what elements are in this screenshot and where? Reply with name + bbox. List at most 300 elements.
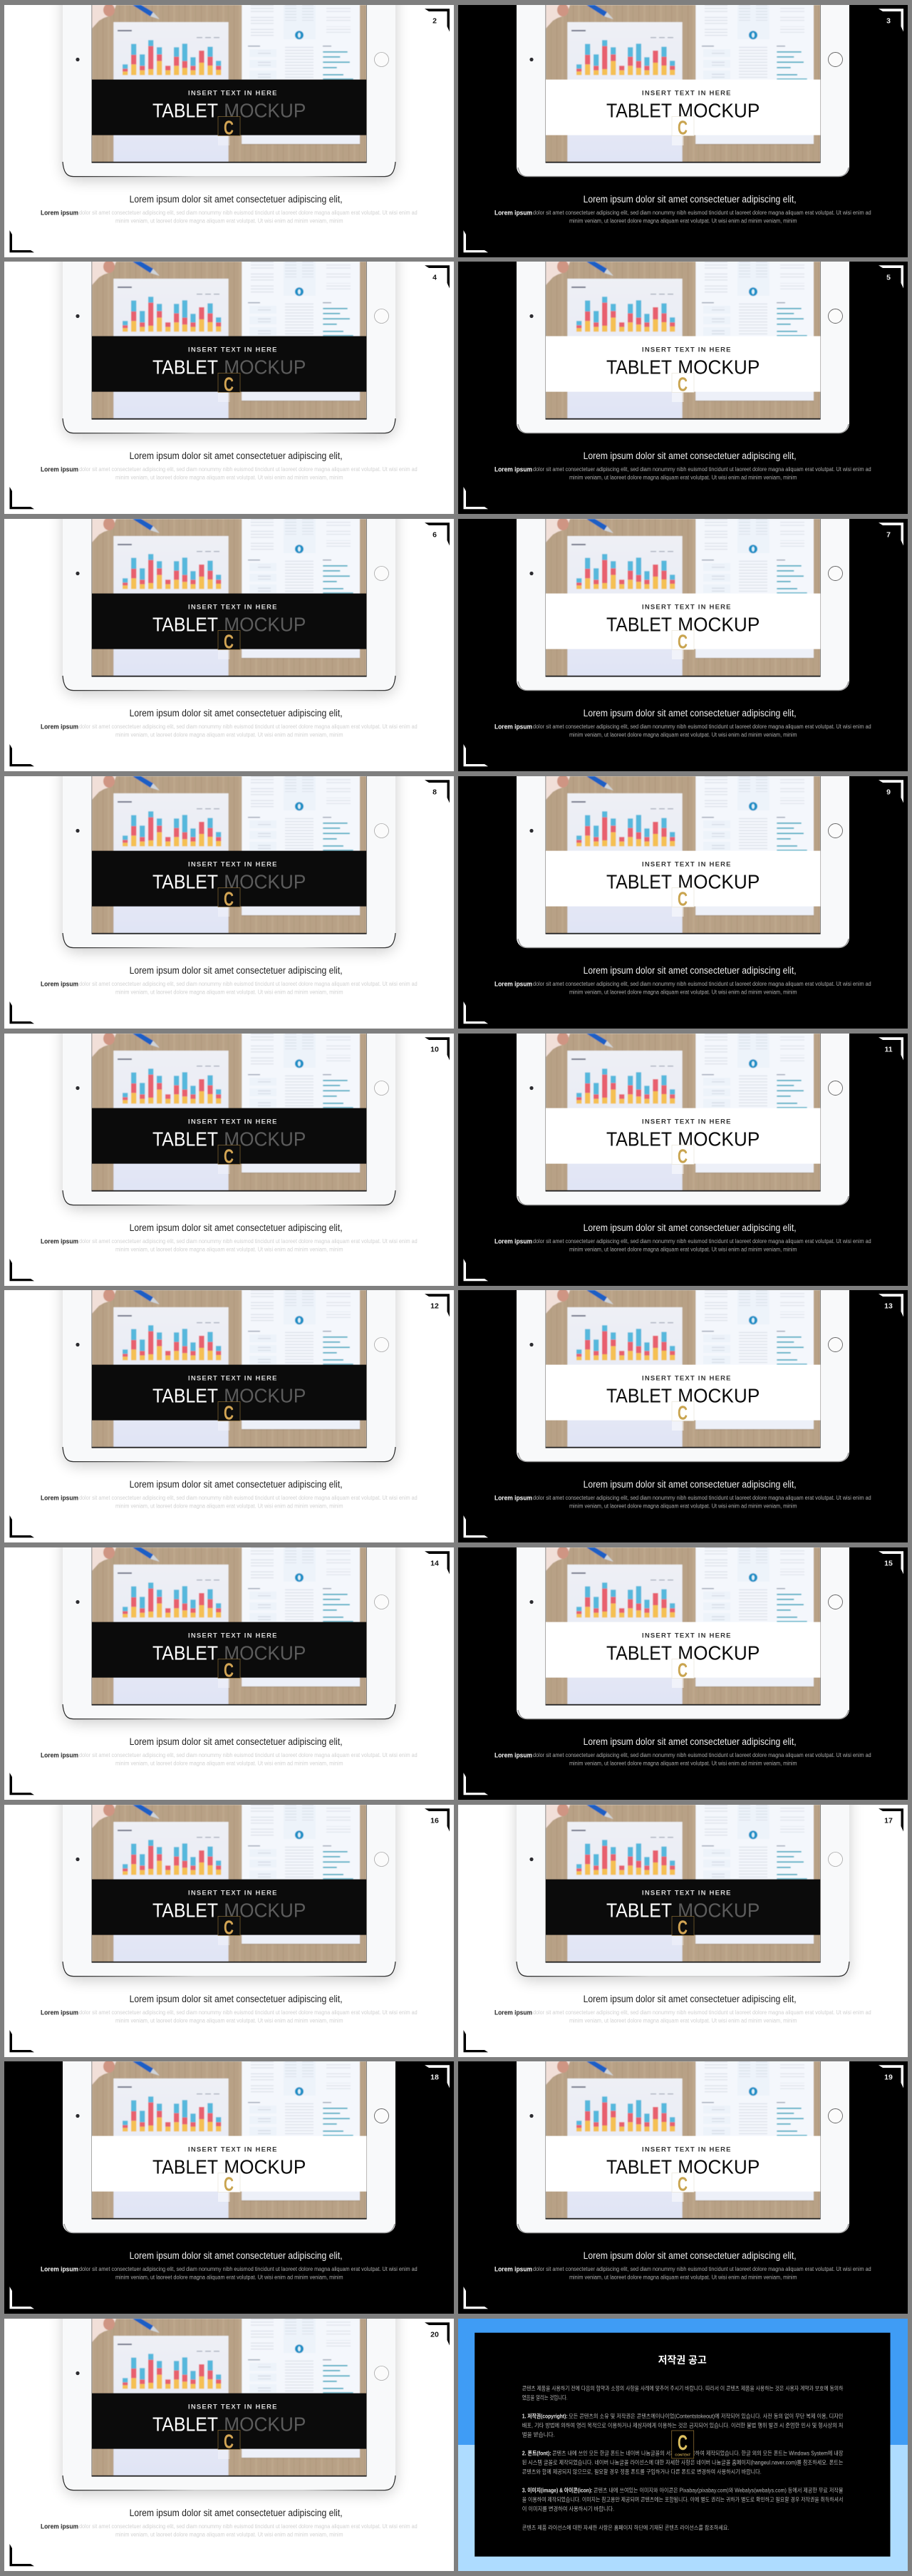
caption text: Lorem ipsum dolor sit amet consectetuer adipiscing elit, — [130, 965, 343, 976]
title band: MOCKUP — [224, 99, 306, 121]
page number bracket: 3 — [886, 17, 891, 25]
caption text: Lorem ipsum dolor sit amet consectetuer adipiscing elit, — [584, 450, 797, 461]
caption text: dolor sit amet consectetuer adipiscing elit, sed diam nonummy nibh euismod tincidunt ut laoreet dolore magna aliquam erat volutpat. Ut wisi enim ad — [533, 1752, 871, 1758]
panel: slide 9 — [458, 776, 908, 1029]
panel: slide 7 — [458, 519, 908, 771]
title band: TABLET — [606, 613, 672, 635]
caption text: minim veniam, ut laoreet dolore magna aliquam erat volutpat. Ut wisi enim ad minim veniam, minim — [115, 1760, 343, 1766]
clause 1: copyright: 벌을 받습니다. — [522, 2431, 555, 2438]
clause 2: font: 콘텐츠와 함께 제공되지 않으므로, 필요할 경우 정품 폰트를 구입하거나 다른 폰트로 변경하여 사용하시기 바랍니다. — [522, 2468, 762, 2475]
caption text: minim veniam, ut laoreet dolore magna aliquam erat volutpat. Ut wisi enim ad minim veniam, minim — [569, 732, 797, 738]
page number bracket: 16 — [430, 1817, 439, 1825]
clause 3: image and icon: 을 이용하여 제작되었습니다. 이미지는 참고용만 제공되며 콘텐츠에는 포함됩니다. 이에 별도 권리는 귀하가 별도로 확인하고 필요할 경우 저작권을 취득하셔서 — [522, 2496, 844, 2503]
caption text: Lorem ipsum dolor sit amet consectetuer adipiscing elit, — [584, 1736, 797, 1747]
intro paragraph — [522, 2384, 844, 2401]
logo badge: C — [678, 2431, 688, 2455]
caption text: Lorem ipsum dolor sit amet consectetuer adipiscing elit, — [130, 2250, 343, 2261]
caption text — [41, 1994, 418, 2024]
page number bracket — [425, 2066, 450, 2088]
title band: MOCKUP — [678, 1128, 760, 1150]
caption text: Lorem ipsum dolor sit amet consectetuer adipiscing elit, — [130, 708, 343, 718]
title band: INSERT TEXT IN HERE — [188, 1889, 276, 1897]
page number bracket: 18 — [430, 2074, 439, 2082]
page number bracket — [879, 780, 903, 803]
title band: MOCKUP — [678, 356, 760, 378]
logo badge: C — [678, 1659, 688, 1681]
logo badge: C — [678, 373, 688, 396]
title band: MOCKUP — [678, 1384, 760, 1406]
title band: TABLET — [606, 99, 672, 121]
caption text: Lorem ipsum dolor sit amet consectetuer adipiscing elit, — [130, 2508, 343, 2518]
logo badge — [218, 116, 240, 145]
title band: INSERT TEXT IN HERE — [188, 2146, 276, 2154]
title band: TABLET — [606, 2156, 672, 2178]
logo badge — [672, 1402, 694, 1431]
clause 1: copyright: 배포, 기타 방법에 의하여 영리 목적으로 이용하거나 제삼자에게 이용하는 것은 금지되어 있습니다. 이러한 불법 행위 발견 시 준엄한 민사 및 형사상의 처 — [522, 2422, 844, 2429]
tablet mockup with photo — [63, 1526, 395, 1723]
clause 1: copyright: 1. 저작권(copyright): — [522, 2413, 568, 2420]
clause 1: copyright — [522, 2413, 844, 2438]
tablet mockup with photo — [517, 2040, 849, 2233]
title band: TABLET — [152, 2413, 218, 2435]
title band — [546, 594, 821, 649]
page number bracket: 9 — [886, 788, 891, 796]
logo badge — [218, 1402, 240, 1431]
tablet mockup with photo — [517, 755, 849, 948]
title band: TABLET — [606, 1128, 672, 1150]
caption text — [41, 194, 418, 224]
title band — [546, 1622, 821, 1677]
page number bracket — [879, 522, 903, 546]
title band: MOCKUP — [678, 99, 760, 121]
title band: INSERT TEXT IN HERE — [188, 1632, 276, 1639]
title band: TABLET — [152, 613, 218, 635]
caption text: Lorem ipsum dolor sit amet consectetuer adipiscing elit, — [130, 194, 343, 205]
title band: TABLET — [606, 1384, 672, 1406]
logo badge — [218, 887, 240, 917]
caption text: minim veniam, ut laoreet dolore magna aliquam erat volutpat. Ut wisi enim ad minim veniam, minim — [569, 2017, 797, 2024]
corner bracket — [464, 1773, 488, 1795]
caption text: minim veniam, ut laoreet dolore magna aliquam erat volutpat. Ut wisi enim ad minim veniam, minim — [115, 475, 343, 481]
caption text — [41, 708, 418, 738]
title band — [92, 79, 366, 135]
caption text — [41, 1736, 418, 1766]
corner bracket — [464, 2030, 488, 2052]
logo badge: C — [224, 1402, 234, 1424]
title band: INSERT TEXT IN HERE — [642, 1889, 731, 1897]
caption text: dolor sit amet consectetuer adipiscing elit, sed diam nonummy nibh euismod tincidunt ut laoreet dolore magna aliquam erat volutpat. Ut wisi enim ad — [79, 723, 418, 730]
title band: INSERT TEXT IN HERE — [188, 860, 276, 868]
logo badge: C — [224, 1145, 234, 1167]
logo badge — [218, 2431, 240, 2459]
tablet mockup with photo — [63, 1783, 395, 1980]
corner bracket — [464, 1515, 488, 1537]
logo badge — [672, 1916, 694, 1945]
caption text — [41, 965, 418, 995]
title band: TABLET — [152, 1899, 218, 1921]
logo badge — [218, 373, 240, 402]
title band: MOCKUP — [678, 2156, 760, 2178]
page number bracket: 10 — [430, 1046, 439, 1053]
caption text — [494, 965, 871, 995]
caption text: Lorem ipsum — [41, 2266, 78, 2274]
panel: slide 14 — [4, 1547, 454, 1800]
caption text: dolor sit amet consectetuer adipiscing elit, sed diam nonummy nibh euismod tincidunt ut laoreet dolore magna aliquam erat volutpat. Ut wisi enim ad — [79, 1752, 418, 1758]
panel: slide 12 — [4, 1290, 454, 1542]
page number bracket: 2 — [432, 17, 437, 25]
corner bracket — [9, 1001, 34, 1024]
logo badge — [218, 1916, 240, 1945]
caption text: minim veniam, ut laoreet dolore magna aliquam erat volutpat. Ut wisi enim ad minim veniam, minim — [569, 217, 797, 224]
title band: MOCKUP — [678, 613, 760, 635]
tablet mockup with photo — [63, 755, 395, 952]
logo badge — [218, 1659, 240, 1688]
title band: INSERT TEXT IN HERE — [642, 89, 731, 97]
title band: INSERT TEXT IN HERE — [642, 860, 731, 868]
page number bracket: 12 — [430, 1302, 439, 1310]
caption text: minim veniam, ut laoreet dolore magna aliquam erat volutpat. Ut wisi enim ad minim veniam, minim — [115, 2532, 343, 2538]
caption text: Lorem ipsum dolor sit amet consectetuer adipiscing elit, — [584, 708, 797, 718]
notice title: 저작권 공고 — [658, 2354, 707, 2366]
page number bracket — [879, 1808, 903, 1831]
intro paragraph: 였음을 알리는 것입니다. — [522, 2394, 568, 2401]
tablet mockup with photo — [517, 240, 849, 433]
page number bracket — [425, 1551, 450, 1574]
black notice card — [475, 2333, 891, 2557]
title band: TABLET — [152, 1384, 218, 1406]
logo badge: C — [678, 1402, 688, 1424]
caption text: Lorem ipsum dolor sit amet consectetuer adipiscing elit, — [584, 194, 797, 205]
page number bracket: 14 — [430, 1560, 439, 1567]
caption text: minim veniam, ut laoreet dolore magna aliquam erat volutpat. Ut wisi enim ad minim veniam, minim — [115, 989, 343, 995]
caption text: Lorem ipsum dolor sit amet consectetuer adipiscing elit, — [584, 965, 797, 976]
caption text: minim veniam, ut laoreet dolore magna aliquam erat volutpat. Ut wisi enim ad minim veniam, minim — [115, 2017, 343, 2024]
tablet mockup with photo — [63, 2297, 395, 2494]
caption text — [494, 2250, 871, 2281]
clause 3: image and icon — [522, 2486, 844, 2512]
caption text: minim veniam, ut laoreet dolore magna aliquam erat volutpat. Ut wisi enim ad minim veniam, minim — [569, 1503, 797, 1510]
panel: slide 4 — [4, 262, 454, 514]
title band: MOCKUP — [224, 356, 306, 378]
caption text — [494, 1479, 871, 1510]
tablet mockup with photo — [517, 1526, 849, 1719]
caption text: minim veniam, ut laoreet dolore magna aliquam erat volutpat. Ut wisi enim ad minim veniam, minim — [569, 989, 797, 995]
caption text: dolor sit amet consectetuer adipiscing elit, sed diam nonummy nibh euismod tincidunt ut laoreet dolore magna aliquam erat volutpat. Ut wisi enim ad — [79, 2523, 418, 2530]
title band — [92, 594, 366, 649]
caption text: Lorem ipsum dolor sit amet consectetuer adipiscing elit, — [584, 1479, 797, 1490]
tablet mockup with photo — [63, 2040, 395, 2233]
caption text — [494, 1222, 871, 1252]
panel: slide 17 — [458, 1805, 908, 2057]
intro paragraph: 콘텐츠 제품을 사용하기 전에 다음의 협약과 소정의 사항을 사례에 맞추어 주시기 바랍니다. 따라서 이 콘텐츠 제품을 사용하는 것은 사용자 계약과 보호에 동의하 — [522, 2384, 844, 2391]
corner bracket — [9, 1515, 34, 1537]
caption text: dolor sit amet consectetuer adipiscing elit, sed diam nonummy nibh euismod tincidunt ut laoreet dolore magna aliquam erat volutpat. Ut wisi enim ad — [79, 981, 418, 987]
logo badge — [672, 1659, 694, 1688]
title band: TABLET — [606, 870, 672, 892]
logo badge: C — [224, 1659, 234, 1681]
tablet mockup with photo — [63, 498, 395, 694]
panel: slide 8 — [4, 776, 454, 1029]
logo badge — [672, 373, 694, 402]
title band — [92, 1365, 366, 1421]
caption text: minim veniam, ut laoreet dolore magna aliquam erat volutpat. Ut wisi enim ad minim veniam, minim — [569, 1246, 797, 1252]
page number bracket — [879, 1294, 903, 1317]
caption text — [494, 1736, 871, 1766]
panel: slide 6 — [4, 519, 454, 771]
caption text: Lorem ipsum — [41, 1495, 78, 1503]
corner bracket — [9, 1773, 34, 1795]
title band: MOCKUP — [224, 1128, 306, 1150]
panel: slide 19 — [458, 2061, 908, 2314]
title band: TABLET — [152, 1642, 218, 1664]
title band: INSERT TEXT IN HERE — [642, 1375, 731, 1383]
caption text: Lorem ipsum — [494, 1495, 532, 1503]
title band: MOCKUP — [224, 613, 306, 635]
caption text — [494, 194, 871, 224]
tablet mockup with photo — [517, 1269, 849, 1462]
caption text: Lorem ipsum — [494, 209, 532, 217]
caption text: Lorem ipsum dolor sit amet consectetuer adipiscing elit, — [130, 1222, 343, 1232]
title band: MOCKUP — [224, 870, 306, 892]
logo badge — [672, 887, 694, 917]
caption text: dolor sit amet consectetuer adipiscing elit, sed diam nonummy nibh euismod tincidunt ut laoreet dolore magna aliquam erat volutpat. Ut wisi enim ad — [533, 981, 871, 987]
caption text: Lorem ipsum — [41, 209, 78, 217]
caption text: dolor sit amet consectetuer adipiscing elit, sed diam nonummy nibh euismod tincidunt ut laoreet dolore magna aliquam erat volutpat. Ut wisi enim ad — [79, 466, 418, 473]
logo badge — [672, 2173, 694, 2202]
title band: MOCKUP — [678, 1642, 760, 1664]
logo badge: C — [224, 887, 234, 910]
title band: TABLET — [152, 870, 218, 892]
page number bracket — [879, 2066, 903, 2088]
corner bracket — [464, 1258, 488, 1281]
caption text: dolor sit amet consectetuer adipiscing elit, sed diam nonummy nibh euismod tincidunt ut laoreet dolore magna aliquam erat volutpat. Ut wisi enim ad — [533, 210, 871, 216]
caption text: dolor sit amet consectetuer adipiscing elit, sed diam nonummy nibh euismod tincidunt ut laoreet dolore magna aliquam erat volutpat. Ut wisi enim ad — [79, 210, 418, 216]
title band: INSERT TEXT IN HERE — [188, 1118, 276, 1125]
title band: INSERT TEXT IN HERE — [188, 346, 276, 354]
caption text: Lorem ipsum — [494, 2009, 532, 2016]
logo badge: C — [224, 1916, 234, 1938]
caption text: Lorem ipsum — [494, 980, 532, 988]
caption text: Lorem ipsum dolor sit amet consectetuer adipiscing elit, — [584, 2250, 797, 2261]
corner bracket — [464, 744, 488, 766]
page number bracket: 13 — [884, 1302, 893, 1310]
corner bracket — [9, 230, 34, 252]
tablet mockup with photo — [517, 0, 849, 177]
title band: MOCKUP — [224, 1899, 306, 1921]
title band — [92, 1879, 366, 1934]
logo badge: C — [224, 116, 234, 138]
caption text: Lorem ipsum — [41, 2523, 78, 2530]
title band: INSERT TEXT IN HERE — [642, 1118, 731, 1125]
title band — [92, 850, 366, 906]
page number bracket: 8 — [432, 788, 437, 796]
logo badge: C — [224, 373, 234, 396]
title band — [92, 2394, 366, 2449]
caption text: Lorem ipsum — [41, 980, 78, 988]
caption text: Lorem ipsum — [41, 723, 78, 731]
title band: TABLET — [606, 1899, 672, 1921]
caption text: dolor sit amet consectetuer adipiscing elit, sed diam nonummy nibh euismod tincidunt ut laoreet dolore magna aliquam erat volutpat. Ut wisi enim ad — [79, 2266, 418, 2272]
tablet mockup with photo — [63, 0, 395, 180]
page number bracket: 6 — [432, 531, 437, 539]
page number bracket — [425, 266, 450, 289]
page number bracket — [425, 9, 450, 31]
page number bracket — [879, 9, 903, 31]
title band: INSERT TEXT IN HERE — [188, 604, 276, 612]
logo badge — [672, 1145, 694, 1173]
corner bracket — [9, 2544, 34, 2566]
panel: slide 2 — [4, 5, 454, 257]
logo badge: C — [678, 887, 688, 910]
page number bracket — [879, 1551, 903, 1574]
caption text — [41, 1479, 418, 1510]
page number bracket — [879, 1037, 903, 1060]
clause 3: image and icon: 이 이미지를 변경하여 사용하시기 바랍니다. — [522, 2505, 614, 2512]
caption text — [41, 2250, 418, 2281]
corner bracket — [464, 2287, 488, 2309]
logo badge: C — [678, 631, 688, 653]
title band: INSERT TEXT IN HERE — [642, 346, 731, 354]
caption text: Lorem ipsum — [494, 466, 532, 474]
logo badge — [218, 2173, 240, 2202]
page number bracket: 15 — [884, 1560, 893, 1567]
title band — [546, 1879, 821, 1934]
page number bracket: 17 — [884, 1817, 893, 1825]
caption text: Lorem ipsum dolor sit amet consectetuer adipiscing elit, — [584, 1994, 797, 2004]
tablet mockup with photo — [517, 1783, 849, 1980]
panel: slide 16 — [4, 1805, 454, 2057]
logo badge: C — [678, 116, 688, 138]
caption text: Lorem ipsum dolor sit amet consectetuer adipiscing elit, — [130, 1479, 343, 1490]
page number bracket: 11 — [885, 1046, 893, 1053]
logo badge — [672, 116, 694, 145]
caption text: Lorem ipsum — [494, 1237, 532, 1245]
clause 3: image and icon: 3. 이미지(image) & 아이콘(icon): — [522, 2486, 593, 2493]
title band: MOCKUP — [224, 2413, 306, 2435]
title band: TABLET — [606, 356, 672, 378]
panel: slide 5 — [458, 262, 908, 514]
caption text — [494, 708, 871, 738]
corner bracket — [9, 487, 34, 510]
tablet mockup with photo — [63, 1012, 395, 1208]
page number bracket: 4 — [432, 274, 437, 282]
caption text: dolor sit amet consectetuer adipiscing elit, sed diam nonummy nibh euismod tincidunt ut laoreet dolore magna aliquam erat volutpat. Ut wisi enim ad — [79, 2009, 418, 2016]
panel: slide 18 — [4, 2061, 454, 2314]
clause 1: copyright: 모든 콘텐츠의 소유 및 저작권은 콘텐츠에이나이었(Contentstokeout)에 저작되어 있습니다. 사전 동의 없이 무단 복제 이용, 디자인 — [569, 2413, 844, 2420]
page number bracket — [425, 780, 450, 803]
closing line: 콘텐츠 제품 라이선스에 대한 자세한 사항은 홈페이지 하단에 기재된 콘텐츠 라이선스를 참조하세요. — [522, 2524, 730, 2531]
caption text: minim veniam, ut laoreet dolore magna aliquam erat volutpat. Ut wisi enim ad minim veniam, minim — [115, 2274, 343, 2281]
page number bracket — [425, 522, 450, 546]
tablet mockup with photo — [517, 1012, 849, 1205]
logo badge — [672, 631, 694, 659]
caption text: dolor sit amet consectetuer adipiscing elit, sed diam nonummy nibh euismod tincidunt ut laoreet dolore magna aliquam erat volutpat. Ut wisi enim ad — [533, 466, 871, 473]
title band: MOCKUP — [678, 1899, 760, 1921]
page number bracket — [425, 2322, 450, 2346]
caption text: dolor sit amet consectetuer adipiscing elit, sed diam nonummy nibh euismod tincidunt ut laoreet dolore magna aliquam erat volutpat. Ut wisi enim ad — [533, 1237, 871, 1244]
title band — [546, 2136, 821, 2192]
clause 2: font — [522, 2450, 844, 2475]
corner bracket — [464, 1001, 488, 1024]
caption text: minim veniam, ut laoreet dolore magna aliquam erat volutpat. Ut wisi enim ad minim veniam, minim — [569, 1760, 797, 1766]
caption text: dolor sit amet consectetuer adipiscing elit, sed diam nonummy nibh euismod tincidunt ut laoreet dolore magna aliquam erat volutpat. Ut wisi enim ad — [79, 1237, 418, 1244]
caption text: Lorem ipsum — [494, 1751, 532, 1759]
caption text — [41, 1222, 418, 1252]
tablet mockup with photo — [63, 1269, 395, 1465]
title band — [546, 1108, 821, 1163]
logo badge: C — [678, 1145, 688, 1167]
page number bracket: 19 — [884, 2074, 893, 2082]
title band: MOCKUP — [224, 1384, 306, 1406]
panel: slide 13 — [458, 1290, 908, 1542]
caption text: Lorem ipsum dolor sit amet consectetuer adipiscing elit, — [130, 1994, 343, 2004]
tablet mockup with photo — [63, 240, 395, 437]
title band: TABLET — [606, 1642, 672, 1664]
caption text: dolor sit amet consectetuer adipiscing elit, sed diam nonummy nibh euismod tincidunt ut laoreet dolore magna aliquam erat volutpat. Ut wisi enim ad — [533, 2009, 871, 2016]
caption text: minim veniam, ut laoreet dolore magna aliquam erat volutpat. Ut wisi enim ad minim veniam, minim — [115, 732, 343, 738]
caption text: Lorem ipsum dolor sit amet consectetuer adipiscing elit, — [584, 1222, 797, 1232]
title band: TABLET — [152, 1128, 218, 1150]
panel: slide 11 — [458, 1034, 908, 1286]
corner bracket — [9, 1258, 34, 1281]
caption text: Lorem ipsum — [41, 1237, 78, 1245]
caption text: minim veniam, ut laoreet dolore magna aliquam erat volutpat. Ut wisi enim ad minim veniam, minim — [115, 1246, 343, 1252]
page number bracket: 20 — [430, 2331, 439, 2339]
caption text — [494, 1994, 871, 2024]
title band: INSERT TEXT IN HERE — [188, 1375, 276, 1383]
caption text — [494, 450, 871, 481]
caption text: minim veniam, ut laoreet dolore magna aliquam erat volutpat. Ut wisi enim ad minim veniam, minim — [569, 2274, 797, 2281]
caption text: Lorem ipsum — [41, 1751, 78, 1759]
logo badge: C — [224, 2173, 234, 2195]
caption text: dolor sit amet consectetuer adipiscing elit, sed diam nonummy nibh euismod tincidunt ut laoreet dolore magna aliquam erat volutpat. Ut wisi enim ad — [533, 2266, 871, 2272]
caption text: Lorem ipsum — [41, 2009, 78, 2016]
logo badge — [672, 2431, 694, 2458]
corner bracket — [464, 230, 488, 252]
caption text: dolor sit amet consectetuer adipiscing elit, sed diam nonummy nibh euismod tincidunt ut laoreet dolore magna aliquam erat volutpat. Ut wisi enim ad — [533, 1495, 871, 1501]
clause 2: font: 된 시스템 글꼴로 제작되었습니다. 네이버 나눔글꼴 라이선스에 대한 자세한 사항은 네이버 나눔글꼴 홈페이지(hangeul.naver.com)를 참조하세요. 폰트는 — [522, 2459, 844, 2466]
logo badge: C — [224, 2430, 234, 2452]
page number bracket — [879, 266, 903, 289]
caption text — [41, 2508, 418, 2538]
panel: copyright notice — [458, 2319, 908, 2571]
logo badge — [218, 631, 240, 659]
logo badge — [218, 1145, 240, 1173]
page number bracket: 7 — [886, 531, 891, 539]
title band: TABLET — [152, 99, 218, 121]
title band: INSERT TEXT IN HERE — [188, 89, 276, 97]
logo badge: C — [678, 2173, 688, 2195]
caption text: Lorem ipsum — [494, 723, 532, 731]
title band — [92, 1622, 366, 1677]
caption text: Lorem ipsum dolor sit amet consectetuer adipiscing elit, — [130, 1736, 343, 1747]
page number bracket — [425, 1808, 450, 1831]
title band — [546, 850, 821, 906]
title band: MOCKUP — [224, 2156, 306, 2178]
panel: slide 15 — [458, 1547, 908, 1800]
clause 3: image and icon: 콘텐츠 내에 쓰여있는 이미지와 아이콘은 Pixabay(pixabay.com)와 Webalys(webalys.com) 등에서 제공한 무료 저작물 — [594, 2486, 844, 2493]
logo badge: CONTENT — [675, 2453, 690, 2457]
caption text: Lorem ipsum dolor sit amet consectetuer adipiscing elit, — [130, 450, 343, 461]
caption text: dolor sit amet consectetuer adipiscing elit, sed diam nonummy nibh euismod tincidunt ut laoreet dolore magna aliquam erat volutpat. Ut wisi enim ad — [79, 1495, 418, 1501]
page number bracket: 5 — [886, 274, 891, 282]
logo badge: C — [224, 631, 234, 653]
panel: slide 20 — [4, 2319, 454, 2571]
corner bracket — [9, 744, 34, 766]
title band: MOCKUP — [224, 1642, 306, 1664]
logo badge: C — [678, 1916, 688, 1938]
caption text: minim veniam, ut laoreet dolore magna aliquam erat volutpat. Ut wisi enim ad minim veniam, minim — [115, 1503, 343, 1510]
